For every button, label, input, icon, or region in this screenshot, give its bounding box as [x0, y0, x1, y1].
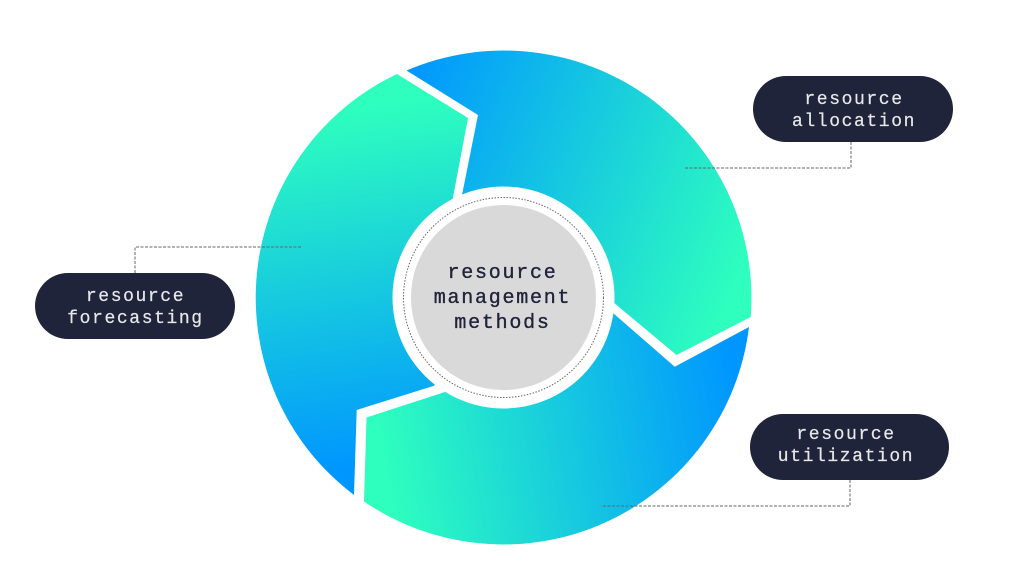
centre hub [392, 186, 614, 408]
segment: resource utilization arrow [364, 297, 749, 544]
label: resource forecasting [35, 273, 235, 339]
label: resource utilization: utilization [778, 447, 914, 467]
connector: forecasting [135, 247, 301, 273]
label: resource allocation: allocation [792, 112, 916, 132]
label: resource utilization [750, 414, 949, 480]
centre title: methods [454, 312, 551, 335]
connector: allocation [685, 142, 851, 168]
centre title: management [434, 287, 571, 310]
label: resource utilization: resource [796, 425, 896, 445]
centre title: resource [447, 262, 558, 285]
label: resource forecasting: forecasting [67, 309, 204, 329]
segment: resource forecasting arrow [256, 74, 503, 495]
label: resource forecasting: resource [86, 287, 185, 307]
label: resource allocation: resource [804, 90, 904, 110]
segment: resource allocation arrow [406, 51, 751, 355]
label: resource allocation [753, 76, 953, 142]
connector: utilization [601, 480, 850, 506]
